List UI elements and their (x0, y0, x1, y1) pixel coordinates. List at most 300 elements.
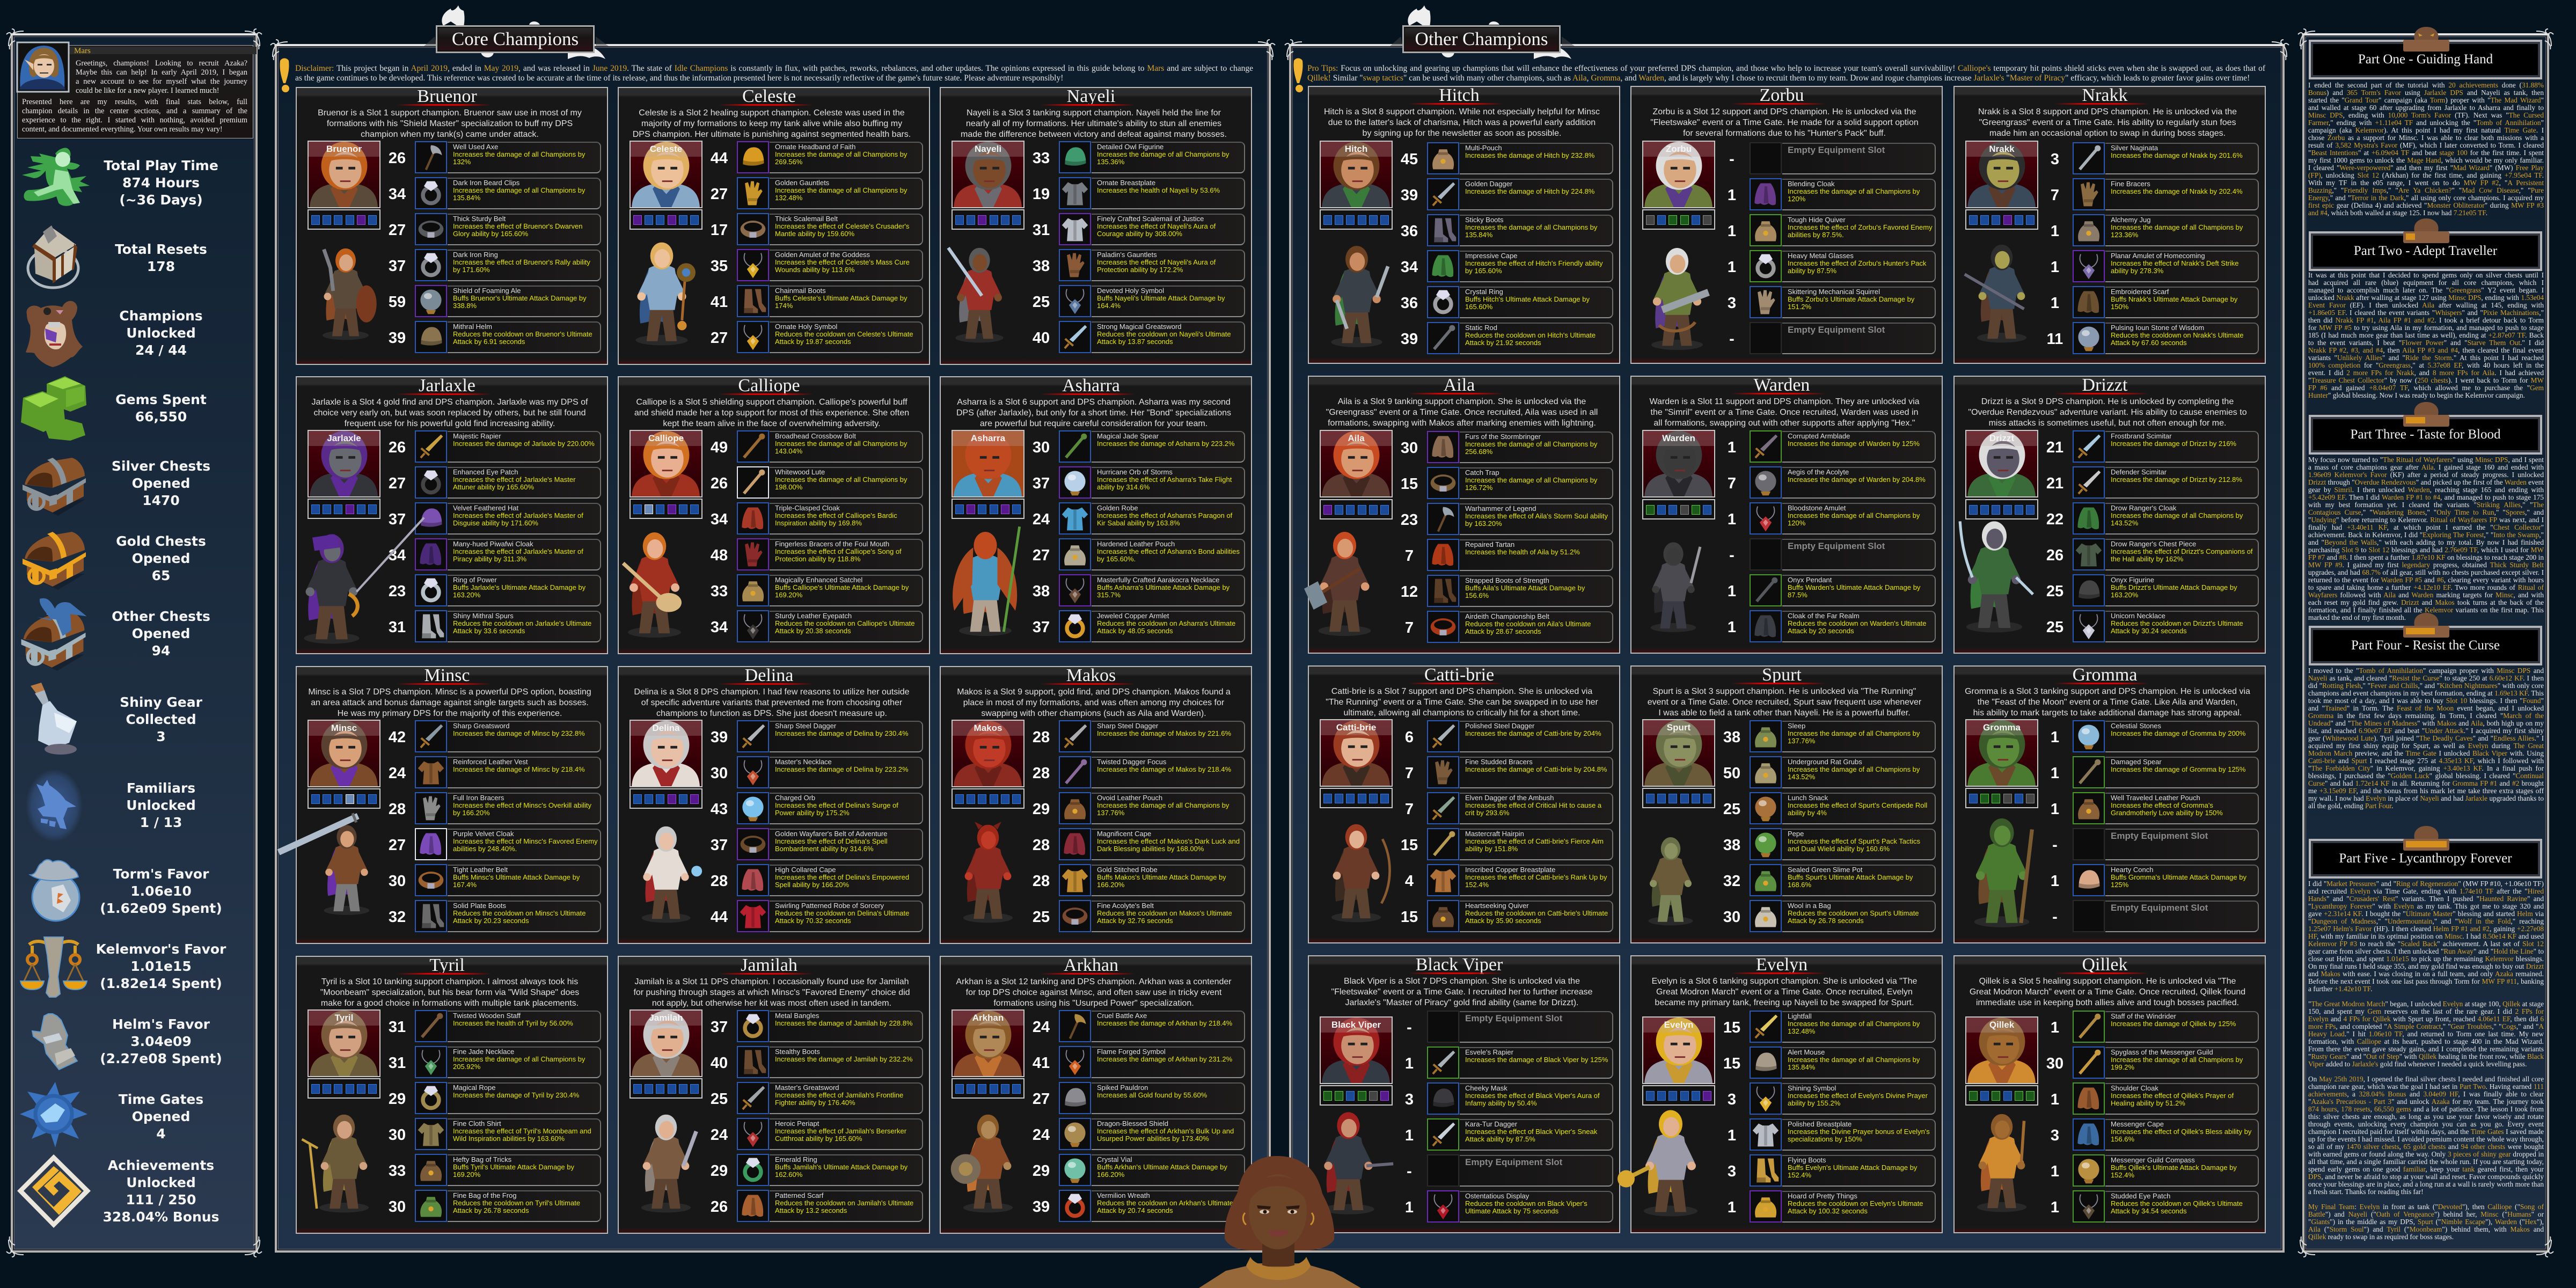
item: Heartseeking Quiver: 15 (1401, 909, 1418, 926)
intro text top (76, 59, 247, 95)
item: Detailed Owl Figurine: 33 (1033, 150, 1050, 167)
item: Blending Cloak: 1 (1728, 187, 1736, 204)
item: Masterfully Crafted Aarakocra Necklace: 38 (1033, 583, 1050, 600)
item: Damaged Spear (1953, 756, 2266, 788)
item: Vermilion Wreath: Vermilion Wreath (1097, 1191, 1150, 1199)
item: Master's Necklace: 30 (711, 765, 728, 782)
icon: gold chest (23, 532, 86, 590)
description: Bruenor is a Slot 1 support champion. Bruenor saw use in most of my (318, 108, 582, 118)
item: Reinforced Leather Vest: Reinforced Leather Vest (453, 758, 528, 766)
item: Hearty Conch: 1 (2051, 873, 2059, 890)
description: the "Feast of the Moon" event or a Time Gate. Like Aila and Warden, (1978, 698, 2237, 707)
item: Shoulder Cloak (1953, 1082, 2266, 1115)
item: Drow Ranger's Chest Piece: Drow Ranger's Chest Piece (2111, 540, 2196, 548)
intro text bottom: Presented here are my results, with final stats below, full (22, 98, 247, 106)
item: Spiked Pauldron: Increases all Gold found by 55.60% (1097, 1091, 1207, 1099)
story part 1 text: Minsc DPS, ending with 10,000 Torm's Favor (TF). Next was "The Cursed (2308, 111, 2544, 119)
item: Aegis of the Acolyte: Increases the damage of Warden by 204.8% (1788, 475, 1926, 484)
item: Repaired Tartan: Increases the health of Aila by 51.2% (1465, 548, 1580, 556)
item: Polished Breastplate: 1 (1728, 1127, 1736, 1144)
item: Aegis of the Acolyte (1630, 466, 1943, 499)
speaker name (69, 47, 257, 54)
item: Corrupted Armblade: Increases the damage of Warden by 125% (1788, 440, 1920, 448)
item: Velvet Feathered Hat: 37 (389, 511, 406, 528)
stat: Gems Spent: Gems Spent (115, 392, 207, 407)
intro text bottom: content, and documented everything. Your own results may vary! (22, 125, 223, 134)
item: Golden Wayfarer's Belt of Adventure: Golden Wayfarer's Belt of Adventure (775, 830, 887, 838)
panel: Arkhan (940, 956, 1252, 1234)
description (1630, 397, 1938, 429)
item: Multi-Pouch (1308, 142, 1620, 174)
item: Heartseeking Quiver: Reduces the cooldown on Catti-brie's Ultimate Attack by 35.90 seconds (1465, 909, 1608, 925)
item: Inscribed Copper Breastplate: 4 (1405, 873, 1414, 890)
gear slots (1320, 499, 1393, 519)
item: Shining Symbol (1630, 1082, 1943, 1115)
item: Empty Equipment Slot: Empty Equipment Slot (1788, 325, 1885, 335)
stat: Total Play Time: (~36 Days) (119, 192, 203, 208)
item: Ornate Breastplate (940, 177, 1252, 209)
panel: Nayeli (940, 87, 1252, 365)
item: Hurricane Orb of Storms: 37 (1033, 475, 1050, 492)
item: Golden Amulet of the Goddess (618, 249, 930, 281)
description: Nrakk is a Slot 8 support and DPS champion. He is unlocked via the (1978, 107, 2237, 116)
portrait (952, 720, 1024, 787)
item: Dark Iron Beard Clips (296, 177, 608, 209)
character: Asharra (940, 532, 1031, 637)
story part 3 text: My focus now turned to "The Ritual of Wayfarers" using Minsc DPS, and I spent a mass of core champions gear after Aila. I gained stage 160 and ended with 1.96e09 Kelemvor's Favor (KF) after a period of steady progress. I unlocked Drizzt through "Overdue Rendezvous" and picked up the first of the Warden event gear by Simril. I then unlocked Warden, reaching stage 165 and ending with +5.42e09 EF. Then I did Warden FP #1 to #4, and managed to push to stage 175 with my best formation yet. I cleared the variants "Striking Allies," "The Contagious Curse," "Wandering Bones," "Only Time to Run," "Spores," and "Undying" before returning to Kelemvor. Ritual of Wayfarers FP was next, and I finally had +3.40e11 KF, at which point I earned the "Chest Collector" achievement. Back in Kelemvor, I did "Exploring The Forest," "Into the Swamp," and "Beyond the Walls," with each adding to my total. By now I had finished purchasing Slot 9 to Slot 12 blessings and had 2.76e09 TF, which I used for MW FP #7 and #8. I then spent a further 1.87e10 KF on blessings to reach stage 200 in MW FP #9. I gained my first legendary progress, obtained Thick Sturdy Belt upgrades, and had 68.7% of all gear, still with no chests purchased except silver. I returned to the event for Warden FP #5 and #6, clearing every variant with hours to spare and taking home a further +4.12e10 EF. Two more rounds of Ritual of Wayfarers followed with Aila and Warden marking targets for Minsc, and with each reset my gold find grew. Drizzt and Makos took turns at the back of the formation, and I finally finished all the Kelemvor variants on the first map. This marked the end of my first month. (2308, 456, 2544, 621)
stat: Torm's Favor (54, 866, 268, 917)
icon: running figure (22, 148, 90, 206)
item: Charged Orb: Increases the effect of Delina's Surge of Power ability by 175.2% (775, 801, 898, 817)
item: Well Traveled Leather Pouch: Increases the effect of Gromma's Grandmotherly Love ability by 150% (2111, 801, 2223, 817)
item: Wool in a Bag: Reduces the cooldown on Spurt's Ultimate Attack by 26.78 seconds (1788, 909, 1919, 925)
item: Well Used Axe: 26 (389, 150, 406, 167)
item: Planar Amulet of Homecoming (1953, 250, 2266, 282)
item: Elven Dagger of the Ambush: Increases the effect of Critical Hit to cause a crit by 293.6% (1465, 801, 1601, 817)
item: Furs of the Stormbringer: Increases the damage of all Champions by 256.68% (1465, 440, 1597, 456)
portrait: Delina (652, 723, 680, 733)
stat: Total Resets (115, 241, 207, 274)
item: Tough Hide Quiver: 1 (1728, 223, 1736, 240)
gear slots (1642, 788, 1715, 808)
stat: Achievements: Unlocked (126, 1175, 196, 1190)
portrait (308, 1009, 380, 1077)
item: Empty Equipment Slot (1308, 1154, 1620, 1187)
stat: Gold Chests: Gold Chests (116, 533, 206, 549)
item: Spyglass of the Messenger Guild: 30 (2046, 1055, 2063, 1072)
item: Sharp Steel Dagger: Sharp Steel Dagger (1097, 722, 1158, 730)
item: Staff of the Windrider: Increases the damage of Qillek by 125% (2111, 1020, 2236, 1028)
item: Repaired Tartan (1308, 539, 1620, 571)
panel: Warden (1630, 376, 1943, 654)
item: Thick Sturdy Belt: Thick Sturdy Belt (453, 215, 506, 223)
character: Arkhan (956, 1111, 1020, 1217)
item: Multi-Pouch: Multi-Pouch (1465, 144, 1502, 152)
description: Celeste is a Slot 2 healing support champion. Celeste was used in the (639, 108, 905, 118)
story part 1 text: chose Zorbu as a support for Minsc. I was able to clear both missions with a (2308, 134, 2544, 142)
title: Arkhan (1064, 955, 1118, 975)
description: swapping with other champions (such as Aila and Warden). (981, 709, 1206, 718)
icon: time gate star (20, 1082, 87, 1147)
item: Messenger Guild Compass: 1 (2051, 1163, 2059, 1180)
item: Hefty Bag of Tricks: 33 (389, 1162, 406, 1180)
character: Aila (1308, 532, 1381, 637)
item: Shiny Mithral Spurs (296, 610, 608, 642)
item: Heroic Periapt: Heroic Periapt (775, 1119, 819, 1128)
story part 1 text: and #4, which both walled at stage 125. I now had 7.21e05 TF. (2308, 209, 2487, 217)
item: Frostbrand Scimitar: 21 (2046, 439, 2063, 456)
item: Drow Ranger's Chest Piece: 26 (2046, 547, 2063, 564)
item: Impressive Cape (1308, 250, 1620, 282)
item: Tight Leather Belt: Buffs Minsc's Ultimate Attack Damage by 167.4% (453, 873, 580, 889)
item: Thick Sturdy Belt: Increases the effect of Bruenor's Dwarven Glory ability by 165.60% (453, 222, 582, 238)
description: "Greengrass" event or a Time Gate. His ability to regularly stun foes (1979, 118, 2236, 127)
item: Masterfully Crafted Aarakocra Necklace: Buffs Asharra's Ultimate Attack Damage by 315.7% (1097, 583, 1230, 599)
item: Catch Trap: Catch Trap (1465, 469, 1499, 477)
item: Golden Robe (940, 502, 1252, 535)
item: Stealthy Boots (618, 1046, 930, 1078)
intro text bottom (22, 98, 247, 134)
item: Twisted Dagger Focus (940, 756, 1252, 788)
item: Master's Necklace (618, 756, 930, 788)
title: Qillek (2082, 955, 2127, 975)
character: Drizzt (1958, 516, 2031, 639)
description: the "Simril" event or a Time Gate. Once recruited, Warden was used in (1651, 408, 1918, 417)
disclaimer text: as the game continues to be developed. This reference was created to be accurate at the time of its release, and thus the information presented here is not necessarily reflective of the game's future state. Please adventure responsibly! (295, 73, 1063, 83)
equipment list (1308, 1011, 1620, 1226)
item: Crystal Ring (1308, 286, 1620, 318)
description: Evelyn is a Slot 6 tanking support champion. She is unlocked via "The (1652, 977, 1917, 986)
item: Ovoid Leather Pouch: 29 (1033, 801, 1050, 818)
stat: Total Play Time: 874 Hours (122, 175, 200, 191)
story part 4 header: Part Four - Resist the Curse (2351, 638, 2500, 653)
story part 1 text: Bonus) and 365 Torm's Favor using Jarlaxle DPS and Nayeli as tank, then (2308, 89, 2544, 97)
item: Magically Enhanced Satchel (618, 574, 930, 606)
panel: Asharra (940, 376, 1252, 654)
item: Tough Hide Quiver: Increases the effect of Zorbu's Favored Enemy abilities by 87.5%. (1788, 223, 1933, 239)
item: Sharp Greatsword: 42 (389, 729, 406, 746)
intro box: Mars (17, 45, 253, 138)
item: Patterned Scarf: Patterned Scarf (775, 1191, 823, 1199)
item: Magnificent Cape: Increases the effect of Makos's Dark Luck and Dark Blessing abilities by 168.00% (1097, 837, 1240, 853)
gear slots (952, 1078, 1024, 1099)
item: Warhammer of Legend: Increases the effect of Aila's Storm Soul ability by 163.20% (1465, 512, 1608, 528)
item: Chainmail Boots: Buffs Celeste's Ultimate Attack Damage by 174% (775, 294, 907, 310)
item: Emerald Ring: Buffs Jamilah's Ultimate Attack Damage by 162.60% (775, 1163, 908, 1179)
description: formations with his "Shield Master" specialization to buff my DPS (327, 119, 573, 128)
item: Static Rod: 39 (1401, 331, 1418, 348)
item: Sharp Greatsword (296, 720, 608, 752)
item: Hoard of Pretty Things (1630, 1190, 1943, 1223)
item: Triple-Clasped Cloak: 34 (711, 511, 728, 528)
item: Ostentatious Display: Reduces the cooldown on Black Viper's Ultimate Attack by 75 seconds (1465, 1199, 1587, 1215)
item: Shield of Foaming Ale: Buffs Bruenor's Ultimate Attack Damage by 338.8% (453, 294, 587, 310)
story part 2 text: +1.86e05 EF. I cleared the event variants "Whispers" and "Pixie Machinations," (2308, 309, 2544, 317)
item: Golden Robe: 24 (1033, 511, 1050, 528)
item: Tight Leather Belt: 30 (389, 873, 406, 890)
item: Flame Forged Symbol: 41 (1033, 1055, 1050, 1072)
intro text top: a new account to see for myself what the journey (76, 77, 247, 86)
item: Staff of the Windrider: Staff of the Windrider (2111, 1012, 2176, 1020)
item: Drow Ranger's Chest Piece: Increases the effect of Drizzt's Companions of the Hall ability by 162% (2111, 547, 2253, 563)
item: Twisted Dagger Focus: 28 (1033, 765, 1050, 782)
stat: Torm's Favor: (1.62e09 Spent) (100, 901, 222, 916)
item: Dark Iron Ring: Dark Iron Ring (453, 251, 498, 259)
item: Twisted Dagger Focus: Twisted Dagger Focus (1097, 758, 1166, 766)
story part 2 header: Part Two - Adept Traveller (2354, 244, 2497, 258)
stat: Champions Unlocked: Unlocked (126, 325, 196, 341)
item: Solid Plate Boots: Solid Plate Boots (453, 902, 506, 910)
portrait: Black Viper (1331, 1020, 1381, 1030)
item: Messenger Cape (1953, 1118, 2266, 1151)
description: Zorbu is a Slot 12 support and DPS champion. He is unlocked via the (1653, 107, 1916, 116)
stat: Helm's Favor: Helm's Favor (112, 1016, 210, 1032)
item: Fine Acolyte's Belt (940, 900, 1252, 932)
item: Sleep: Increases the damage of all Champions by 137.76% (1788, 729, 1920, 745)
portrait: Arkhan (972, 1013, 1004, 1023)
equipment list (1953, 430, 2266, 646)
item: Pepe: Increases the effect of Spurt's Pack Tactics and Dual Wield ability by 160.6% (1788, 837, 1920, 853)
description (618, 397, 926, 429)
story part 5 text (2308, 880, 2544, 1241)
item: Charged Orb: 43 (711, 801, 728, 818)
stat: Total Resets: 178 (147, 259, 175, 274)
icon: gems (21, 376, 86, 441)
item: Fine Acolyte's Belt: 25 (1033, 909, 1050, 926)
item: Devoted Holy Symbol: Devoted Holy Symbol (1097, 287, 1164, 295)
item: Fine Bracers: Increases the damage of Nrakk by 202.4% (2111, 187, 2243, 195)
item: Purple Velvet Cloak: 27 (389, 837, 406, 854)
stat: Familiars: 1 / 13 (140, 815, 182, 830)
item: Velvet Feathered Hat: Increases the effect of Jarlaxle's Master of Disguise ability by 171.60% (453, 511, 583, 527)
equipment list (1630, 720, 1943, 936)
item: Lightfall: Increases the damage of all Champions by 132.48% (1788, 1020, 1920, 1035)
item: Sticky Boots: Increases the damage of all Champions by 135.84% (1465, 223, 1597, 239)
item: Well Used Axe: Increases the damage of all Champions by 132% (453, 150, 585, 166)
stat: Gold Chests: 65 (152, 568, 170, 583)
stat: Achievements: Achievements (108, 1158, 214, 1173)
item: Frostbrand Scimitar: Increases the damage of Drizzt by 216% (2111, 440, 2236, 448)
item: Mithral Helm: 39 (389, 330, 406, 347)
stat: Silver Chests: 1470 (142, 493, 180, 508)
gear slots (952, 788, 1024, 809)
title: Tyril (429, 955, 465, 975)
item: Polished Steel Dagger: Polished Steel Dagger (1465, 722, 1534, 730)
item: Esvele's Rapier: Esvele's Rapier (1465, 1048, 1513, 1056)
description: for several formations due to his "Hunter's Pack" buff. (1683, 129, 1886, 138)
item: Jeweled Copper Armlet: Reduces the cooldown on Asharra's Ultimate Attack by 48.05 seconds (1097, 619, 1235, 635)
item: Enhanced Eye Patch: 27 (389, 475, 406, 492)
item: Hurricane Orb of Storms: Hurricane Orb of Storms (1097, 468, 1173, 476)
item: Esvele's Rapier: Increases the damage of Black Viper by 125% (1465, 1056, 1608, 1064)
title: Hitch (1439, 85, 1480, 105)
item: Magical Rope: Magical Rope (453, 1084, 496, 1092)
stat: Familiars: Unlocked (126, 797, 196, 813)
portrait: Asharra (971, 433, 1005, 443)
item: Master's Necklace: Master's Necklace (775, 758, 832, 766)
story part 3 header (2309, 415, 2542, 455)
item: Golden Dagger: Increases the damage of Hitch by 224.8% (1465, 187, 1594, 195)
item: Strapped Boots of Strength: Buffs Aila's Ultimate Attack Damage by 156.6% (1465, 584, 1585, 599)
item: Ornate Headband of Faith (618, 141, 930, 173)
item: Bloodstone Amulet: Increases the damage of all Champions by 120% (1788, 511, 1920, 527)
item: Twisted Wooden Staff: Increases the health of Tyril by 56.00% (453, 1019, 573, 1027)
title: Black Viper (1416, 955, 1503, 975)
item: Velvet Feathered Hat (296, 502, 608, 535)
title: Calliope (738, 376, 800, 396)
item: Golden Gauntlets: Increases the damage of all Champions by 132.48% (775, 186, 907, 202)
panel: Qillek (1953, 955, 2266, 1233)
description: Arkhan is a Slot 12 tanking and DPS champion. Arkhan was a contender (956, 977, 1232, 986)
item: Multi-Pouch: 45 (1401, 151, 1418, 168)
item: Ring of Power: Buffs Jarlaxle's Ultimate Attack Damage by 163.20% (453, 583, 586, 599)
item: Strong Magical Greatsword: 40 (1033, 330, 1050, 347)
equipment list (1953, 720, 2266, 936)
description: are powerful but require careful consideration for your team. (980, 419, 1208, 428)
item: Stealthy Boots: Increases the damage of Jamilah by 232.2% (775, 1055, 913, 1063)
description: choice very early on, but was soon replaced by others, but he still found (314, 408, 586, 418)
item: Inscribed Copper Breastplate (1308, 864, 1620, 896)
item: Majestic Rapier (296, 430, 608, 463)
item: Cheeky Mask: Increases the effect of Black Viper's Aura of Infamy ability by 50.4% (1465, 1092, 1600, 1107)
item: Well Traveled Leather Pouch (1953, 792, 2266, 824)
story part 1 text: I ended the second part of the tutorial with 20 achievements done (31.88% (2308, 81, 2544, 89)
icon: silver chest (23, 458, 86, 516)
story part 1 text: result of 3,582 Mystra's Favor (MF), which I later converted to Torm. I cleared (2308, 141, 2544, 149)
item: Cheeky Mask: 3 (1405, 1091, 1414, 1108)
item: Strong Magical Greatsword: Reduces the cooldown on Nayeli's Ultimate Attack by 13.87 seconds (1097, 330, 1231, 346)
item: Planar Amulet of Homecoming: Planar Amulet of Homecoming (2111, 252, 2205, 260)
gear slots (1965, 209, 2038, 230)
description: frequent use for his powerful gold find increasing ability. (345, 419, 555, 428)
character: Qillek (1970, 1111, 2034, 1216)
item: Emerald Ring (618, 1154, 930, 1186)
description (296, 977, 604, 1009)
description: Delina is a Slot 8 DPS champion. I had few reasons to utilize her outside (634, 687, 910, 697)
item: Magnificent Cape (940, 828, 1252, 860)
title: Jarlaxle (419, 376, 475, 396)
heading box: Other Champions: Other Champions (1415, 28, 1548, 49)
character: Minsc (317, 822, 376, 919)
item: Shield of Foaming Ale: 59 (389, 294, 406, 311)
description (1308, 976, 1616, 1008)
portrait (1642, 719, 1715, 787)
character: Zorbu (1640, 248, 1715, 351)
story part 2 text: then did Nrakk FP #1, Aila FP #1 and #2. I took a brief detour back to Torm (2308, 316, 2544, 324)
item: Magical Rope: 29 (389, 1091, 406, 1108)
portrait (630, 141, 702, 208)
story part 2 text (2308, 272, 2544, 399)
item: Stealthy Boots: 40 (711, 1055, 728, 1072)
description: He was my primary DPS for the majority of this experience. (338, 709, 562, 718)
item: Underground Rat Grubs: Underground Rat Grubs (1788, 758, 1862, 766)
item: Hefty Bag of Tricks: Hefty Bag of Tricks (453, 1155, 511, 1163)
panel: Jamilah (618, 956, 930, 1234)
item: Chainmail Boots: 41 (711, 294, 728, 311)
description: Asharra is a Slot 6 support and DPS champion. Asharra was my second (957, 398, 1231, 407)
stat: Helm's Favor (54, 1016, 268, 1067)
portrait (630, 720, 702, 787)
item: Magnificent Cape: 28 (1033, 837, 1050, 854)
item: Unicorn Necklace: Unicorn Necklace (2111, 612, 2165, 620)
description (1308, 686, 1616, 719)
item: Ornate Headband of Faith: Increases the damage of all Champions by 269.56% (775, 150, 907, 166)
title: Zorbu (1759, 85, 1804, 105)
item: Wool in a Bag: 30 (1723, 909, 1740, 926)
panel: Black Viper (1308, 955, 1620, 1233)
story part 1 text: campaign (aka Kelemvor). At this point I had my first natural Time Gate. I (2308, 126, 2544, 134)
item: Messenger Guild Compass (1953, 1154, 2266, 1187)
story part 2 text: managed to accomplish much later on. The "Greengrass" Y2 event began. I (2308, 286, 2544, 294)
item: Heavy Metal Glasses: 1 (1728, 259, 1736, 276)
description (1630, 976, 1938, 1008)
description: Warden is a Slot 11 support and DPS champion. They are unlocked via (1649, 397, 1920, 406)
portrait: Hitch (1345, 144, 1367, 154)
item: Ovoid Leather Pouch: Ovoid Leather Pouch (1097, 794, 1162, 802)
description: nearly all of my formations. Her ultimate's ability to stun all enemies (966, 119, 1221, 128)
description: kept the team alive in the face of overwhelming adversity. (663, 419, 881, 428)
equipment list (1308, 720, 1620, 936)
stat: Time Gates: Time Gates (119, 1092, 203, 1107)
item: Pulsing Ioun Stone of Wisdom (1953, 322, 2266, 354)
description: event or a Time Gate. Once recruited, Spurt saw frequent use whenever (1648, 698, 1921, 707)
item: Heavy Metal Glasses: Increases the effect of Zorbu's Hunter's Pack ability by 87.5% (1788, 259, 1926, 275)
item: Studded Eye Patch: 1 (2051, 1199, 2059, 1216)
item: Spiked Pauldron: 27 (1033, 1091, 1050, 1108)
intro text bottom: champion details in the center sections, and a summary of the (22, 107, 247, 115)
story part 5 header: Part Five - Lycanthropy Forever (2339, 851, 2512, 866)
description: for top DPS choice against Minsc, and often saw use in tricky event (966, 988, 1221, 997)
item: Alert Mouse: Alert Mouse (1788, 1048, 1825, 1056)
stat: Silver Chests: Silver Chests (112, 458, 210, 474)
item: Golden Dagger: 39 (1401, 187, 1418, 204)
portrait: Nayeli (975, 144, 1001, 154)
story part 5 text: "The Great Modron March" began, I unlocked Evelyn at stage 100, Qillek at stage 150, and spent my Gem reserves on the last of the rare gear. I did 2 FPs for Evelyn and 4 FPs for Qillek with Spurt up front, reached 4.06e11 EF, then did 6 more FPs, and completed "A Simple Contract," "Gear Troubles," "Cogs," and "A Heavy Load." I hit 1.06e10 TF, and returned to Torm one last time. My new formation, with Calliope at its heart, pushed to stage 400 in the Mad Wizard. From there the event gave steady gains, and I completed the remaining variants "Rusty Gears" and "Out of Step" with Qillek healing in the front row, while Black Viper added to Jarlaxle's gold find whenever I needed a quick levelling pass. (2308, 1000, 2544, 1068)
item: Impressive Cape: Impressive Cape (1465, 252, 1518, 260)
item: Inscribed Copper Breastplate: Increases the effect of Catti-brie's Rank Up by 152.4% (1465, 873, 1607, 889)
item: Sealed Green Slime Pot: Sealed Green Slime Pot (1788, 866, 1862, 874)
item: Flame Forged Symbol: Increases the damage of Arkhan by 231.2% (1097, 1055, 1232, 1063)
item: High Collared Cape: 28 (711, 873, 728, 890)
item: Flying Boots: Buffs Evelyn's Ultimate Attack Damage by 152.4% (1788, 1163, 1917, 1179)
portrait: Zorbu (1666, 144, 1692, 154)
item: Metal Bangles (618, 1010, 930, 1042)
item: Drow Ranger's Cloak: Increases the damage of all Champions by 143.52% (2111, 511, 2243, 527)
panel: Bruenor (296, 87, 608, 365)
item: Triple-Clasped Cloak: Triple-Clasped Cloak (775, 504, 840, 512)
item: Catch Trap (1308, 467, 1620, 499)
item: Alchemy Jug (1953, 214, 2266, 246)
character: Nayeli (948, 242, 1011, 349)
stat: Gold Chests: Opened (132, 551, 190, 566)
item: Twisted Wooden Staff: Twisted Wooden Staff (453, 1012, 521, 1020)
item: Kara-Tur Dagger: 1 (1405, 1127, 1414, 1144)
item: Broadhead Crossbow Bolt: Increases the damage of all Champions by 143.04% (775, 440, 907, 455)
item: Majestic Rapier: 26 (389, 439, 406, 456)
description: all formations, swapping out with other supports after applying "Hex." (1653, 419, 1915, 428)
description: made the difference between victory and defeat against many bosses. (961, 130, 1227, 139)
gear slots (308, 788, 380, 809)
item: Crystal Ring: Crystal Ring (1465, 288, 1503, 296)
panel: Jarlaxle (296, 376, 608, 654)
item: Golden Robe: Increases the effect of Asharra's Paragon of Kir Sabal ability by 163.8% (1097, 511, 1232, 527)
item: Crystal Vial (940, 1154, 1252, 1186)
item: Empty Equipment Slot: Empty Equipment Slot (2111, 903, 2208, 913)
character: Bruenor (316, 242, 376, 347)
item: Cruel Battle Axe: Cruel Battle Axe (1097, 1012, 1147, 1020)
story part 2 text: 185 (I had much more gear than last time as well), ending at +2.87e07 TF. Back (2308, 331, 2544, 339)
item: Dark Iron Beard Clips: 34 (389, 186, 406, 203)
